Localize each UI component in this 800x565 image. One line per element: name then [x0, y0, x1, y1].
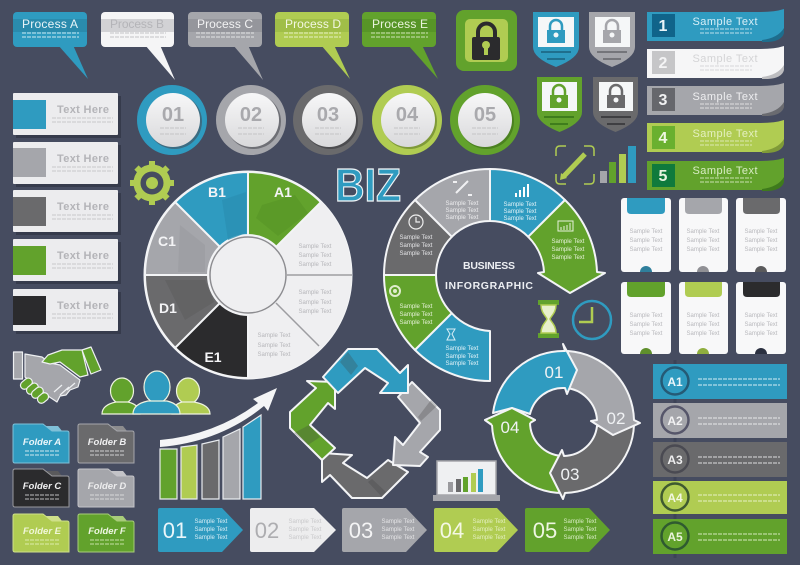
bubble: Process B — [101, 12, 175, 80]
ring labels — [501, 363, 625, 484]
tag 01: Sample Text — [195, 527, 228, 533]
tag card: blue: Sample Text — [630, 229, 663, 235]
sample text, lower right: Sample Text — [299, 300, 332, 306]
growth arrow — [160, 388, 277, 447]
arc sample text — [400, 201, 585, 367]
tag card: lime: Sample Text — [687, 331, 720, 337]
tag card: green: Sample Text — [630, 322, 663, 328]
tag 01: 01 — [163, 518, 187, 543]
icon: gear — [130, 161, 174, 205]
tag 02: 02 — [255, 518, 279, 543]
gray hand — [25, 354, 80, 402]
tag card: dark: Sample Text — [745, 229, 778, 235]
pentagon number tags — [158, 508, 610, 552]
arc sample text: Sample Text — [400, 243, 433, 249]
arc sample text: Sample Text — [552, 247, 585, 253]
arc sample text: Sample Text — [446, 201, 479, 207]
business infographic arc — [384, 169, 605, 381]
card: dark gray — [13, 190, 121, 235]
ribbon 4: 4 — [659, 130, 668, 147]
sample text, bottom: Sample Text — [258, 352, 291, 358]
arc sample text: Sample Text — [446, 346, 479, 352]
ring labels: 04 — [501, 418, 519, 437]
segment C1 — [145, 202, 220, 275]
folder E: Folder E — [23, 526, 62, 537]
row A1: A1 — [667, 375, 683, 389]
arc sample text: Sample Text — [446, 361, 479, 367]
shield: gray — [589, 12, 635, 67]
speech bubbles row — [13, 12, 438, 80]
icon: small gear — [390, 286, 400, 296]
pie base — [144, 171, 352, 379]
tag 03: 03 — [349, 518, 373, 543]
folders grid — [13, 424, 134, 552]
tag 05: Sample Text — [564, 535, 597, 541]
icon: pencil in brackets — [556, 146, 594, 184]
person: left green — [102, 378, 140, 414]
pie chart with A1-E1 segments — [144, 171, 352, 379]
tag card: green: Sample Text — [630, 331, 663, 337]
loop arrow: gray — [393, 382, 440, 466]
numbered ribbons — [647, 9, 784, 191]
tag 05 — [525, 508, 610, 552]
circle 03 — [293, 85, 363, 155]
arc sample text: Sample Text — [446, 215, 479, 221]
card: green: Text Here — [57, 250, 109, 262]
tag card: gray: Sample Text — [687, 247, 720, 253]
arc segment green arrow — [528, 200, 605, 293]
circle 03: 03 — [317, 104, 339, 126]
gray finger lines — [54, 383, 75, 395]
bubble: Process A: Process A — [22, 17, 78, 31]
loop arrow: dark — [322, 453, 408, 498]
bar 5 — [243, 415, 261, 499]
ring labels: 03 — [561, 465, 579, 484]
bubble: Process C — [188, 12, 263, 80]
card: blue — [13, 93, 121, 138]
ring arrow 03 — [550, 425, 634, 499]
segment B1: B1 — [208, 184, 226, 200]
numbered circles row — [137, 85, 520, 155]
person: middle blue — [133, 371, 180, 414]
icon: chart box — [558, 221, 573, 231]
bar 4 — [223, 429, 240, 499]
arc sample text: Sample Text — [446, 354, 479, 360]
tag card: blue: Sample Text — [630, 247, 663, 253]
circle 05 — [450, 85, 520, 155]
tag card: black — [736, 282, 786, 354]
arc sample text: Sample Text — [446, 208, 479, 214]
arc centre title: BUSINESS — [463, 260, 515, 272]
circle 04: 04 — [396, 104, 419, 126]
ring arrow 04 head — [485, 408, 535, 425]
arc sample text: Sample Text — [400, 312, 433, 318]
folder D: Folder D — [88, 481, 126, 492]
right cuff — [82, 347, 101, 374]
card: black: Text Here — [57, 300, 109, 312]
tag 02: Sample Text — [289, 535, 322, 541]
sample text, lower right: Sample Text — [299, 309, 332, 315]
centre disc — [210, 237, 286, 313]
ribbon 3: 3 — [659, 92, 668, 109]
ribbon 5: Sample Text — [692, 165, 758, 177]
tag cards grid — [621, 198, 786, 354]
tag card: blue: Sample Text — [630, 238, 663, 244]
bubble: Process D: Process D — [285, 17, 341, 31]
tag card: dark: Sample Text — [745, 247, 778, 253]
icon: clock — [409, 215, 423, 229]
ribbon 5: 5 — [659, 168, 668, 185]
arc centre title: INFORGRAPHIC — [445, 280, 533, 292]
folder C: Folder C — [23, 481, 61, 492]
shield: dark — [593, 77, 638, 132]
tag 03 — [342, 508, 427, 552]
circle 02 — [216, 85, 286, 155]
bubble: Process E: Process E — [372, 17, 428, 31]
BIZ title: BIZ — [335, 159, 401, 211]
card: gray — [13, 142, 121, 187]
tag card: green — [621, 282, 671, 354]
ring labels: 01 — [545, 363, 563, 382]
tag card: black: Sample Text — [745, 331, 778, 337]
growth bar chart with arrow — [160, 388, 277, 499]
text here cards column — [13, 93, 121, 334]
ribbon 2: Sample Text — [692, 53, 758, 65]
card: green — [13, 239, 121, 284]
row A2 — [653, 403, 787, 438]
green fingers — [19, 376, 50, 405]
segment C1: C1 — [158, 233, 176, 249]
bubble: Process C: Process C — [197, 17, 253, 31]
ribbon 3: Sample Text — [692, 91, 758, 103]
bubble: Process D — [275, 12, 350, 79]
folder B: Folder B — [88, 437, 126, 448]
icon: pencil — [453, 181, 472, 195]
row A4 — [653, 481, 787, 514]
row A2: A2 — [667, 414, 683, 428]
ring labels: 02 — [607, 409, 625, 428]
bubble: Process E — [362, 12, 438, 79]
circle 02: 02 — [240, 104, 262, 126]
tag card: black: Sample Text — [745, 313, 778, 319]
ring arrow 04 body — [485, 408, 563, 493]
tag 03: Sample Text — [382, 535, 415, 541]
tag card: black: Sample Text — [745, 322, 778, 328]
icon: mini bar chart — [600, 146, 636, 183]
tag card: gray: Sample Text — [687, 238, 720, 244]
sample text, upper right: Sample Text — [299, 244, 332, 250]
connector line — [674, 360, 676, 558]
tag 02: Sample Text — [289, 519, 322, 525]
icon: small hourglass — [447, 329, 455, 340]
icon: hourglass — [538, 300, 559, 338]
ribbon 4 — [647, 120, 784, 153]
tag 02 — [250, 508, 336, 552]
arc segment gray — [415, 169, 490, 237]
segment B1 — [175, 172, 248, 247]
shield: green — [537, 77, 582, 132]
ring arrow 01 — [493, 344, 577, 414]
sample text, bottom: Sample Text — [258, 343, 291, 349]
row A4: A4 — [667, 491, 683, 505]
sample text, lower right: Sample Text — [299, 290, 332, 296]
row A3: A3 — [667, 453, 683, 467]
sample text, bottom: Sample Text — [258, 333, 291, 339]
loop arrow: green — [290, 381, 335, 460]
tag 04: Sample Text — [473, 535, 506, 541]
circle 01: 01 — [162, 104, 184, 126]
arc sample text: Sample Text — [400, 304, 433, 310]
arc sample text: Sample Text — [400, 320, 433, 326]
loop fold shading — [294, 352, 437, 496]
row A1 — [653, 364, 787, 399]
icon: people group — [102, 371, 210, 414]
tag 01: Sample Text — [195, 535, 228, 541]
sample text, upper right: Sample Text — [299, 262, 332, 268]
arc sample text: Sample Text — [400, 251, 433, 257]
arc segment green left — [384, 275, 452, 350]
circle 01 — [137, 85, 207, 155]
tag 02: Sample Text — [289, 527, 322, 533]
arc segment blue bottom — [415, 313, 490, 381]
icon: handshake — [14, 347, 101, 405]
icon: laptop chart — [433, 461, 500, 501]
arc sample text: Sample Text — [400, 235, 433, 241]
ribbon 1: 1 — [659, 18, 668, 35]
arc sample text: Sample Text — [504, 202, 537, 208]
circle 05: 05 — [474, 104, 496, 126]
card: gray: Text Here — [57, 153, 109, 165]
circle 04 — [372, 85, 442, 155]
icon: clock — [573, 301, 611, 339]
tag card: blue — [621, 198, 671, 272]
row A3 — [653, 442, 787, 477]
arc sample text: Sample Text — [504, 216, 537, 222]
list A1-A5 — [653, 360, 787, 558]
light segment dividers — [276, 275, 352, 346]
bubble: Process A — [13, 12, 88, 79]
sample text, upper right: Sample Text — [299, 253, 332, 259]
icon: bars — [515, 184, 529, 197]
ribbon 3 — [647, 83, 784, 116]
shield lock icons — [533, 12, 638, 132]
arc sample text: Sample Text — [552, 255, 585, 261]
tag 03: Sample Text — [382, 527, 415, 533]
segment A1 — [248, 172, 321, 247]
segment E1 — [175, 303, 248, 378]
segment D1: D1 — [159, 300, 177, 316]
folder F: Folder F — [88, 526, 126, 537]
tag card: dark — [736, 198, 786, 272]
bar 3 — [202, 440, 219, 499]
ribbon 1 — [647, 9, 784, 42]
segment D1 — [145, 275, 220, 348]
tag card: lime: Sample Text — [687, 313, 720, 319]
tag 05: Sample Text — [564, 519, 597, 525]
tag card: dark: Sample Text — [745, 238, 778, 244]
folder A: Folder A — [23, 437, 61, 448]
tag card: gray: Sample Text — [687, 229, 720, 235]
segment E1: E1 — [204, 349, 222, 365]
shield: blue — [533, 12, 579, 67]
ring with arrows 01-04 — [485, 344, 640, 499]
arc sample text: Sample Text — [504, 209, 537, 215]
tag card: gray — [679, 198, 728, 272]
arc segment blue top — [490, 169, 565, 237]
arc segment dark — [384, 200, 452, 275]
left cuff — [14, 352, 22, 379]
person: right lime — [172, 378, 210, 414]
segment A1: A1 — [274, 184, 292, 200]
tag 04: Sample Text — [473, 519, 506, 525]
tag 04 — [434, 508, 518, 552]
tag 03: Sample Text — [382, 519, 415, 525]
card: blue: Text Here — [57, 104, 109, 116]
tag 01: Sample Text — [195, 519, 228, 525]
ribbon 5 — [647, 158, 784, 191]
tag 01 — [158, 508, 243, 552]
tag card: lime: Sample Text — [687, 322, 720, 328]
tag 05: 05 — [533, 518, 557, 543]
loop arrow: blue — [323, 349, 408, 393]
bubble: Process B: Process B — [110, 17, 164, 31]
bar 2 — [181, 445, 197, 499]
tag 04: Sample Text — [473, 527, 506, 533]
tag 04: 04 — [440, 518, 464, 543]
ribbon 2 — [647, 46, 784, 79]
diamond arrow loop — [290, 349, 440, 498]
icon: padlock tile — [456, 10, 517, 71]
row A5 — [653, 519, 787, 554]
ribbon 2: 2 — [659, 55, 668, 72]
green hand — [42, 350, 88, 377]
row A5: A5 — [667, 530, 683, 544]
arc sample text: Sample Text — [552, 239, 585, 245]
tag card: green: Sample Text — [630, 313, 663, 319]
card: black — [13, 289, 121, 334]
tag 05: Sample Text — [564, 527, 597, 533]
tag card: lime — [679, 282, 728, 354]
bar 1 — [160, 449, 177, 499]
card: dark gray: Text Here — [57, 201, 109, 213]
ring arrow 02 — [565, 351, 640, 435]
ribbon 4: Sample Text — [692, 128, 758, 140]
ribbon 1: Sample Text — [692, 16, 758, 28]
